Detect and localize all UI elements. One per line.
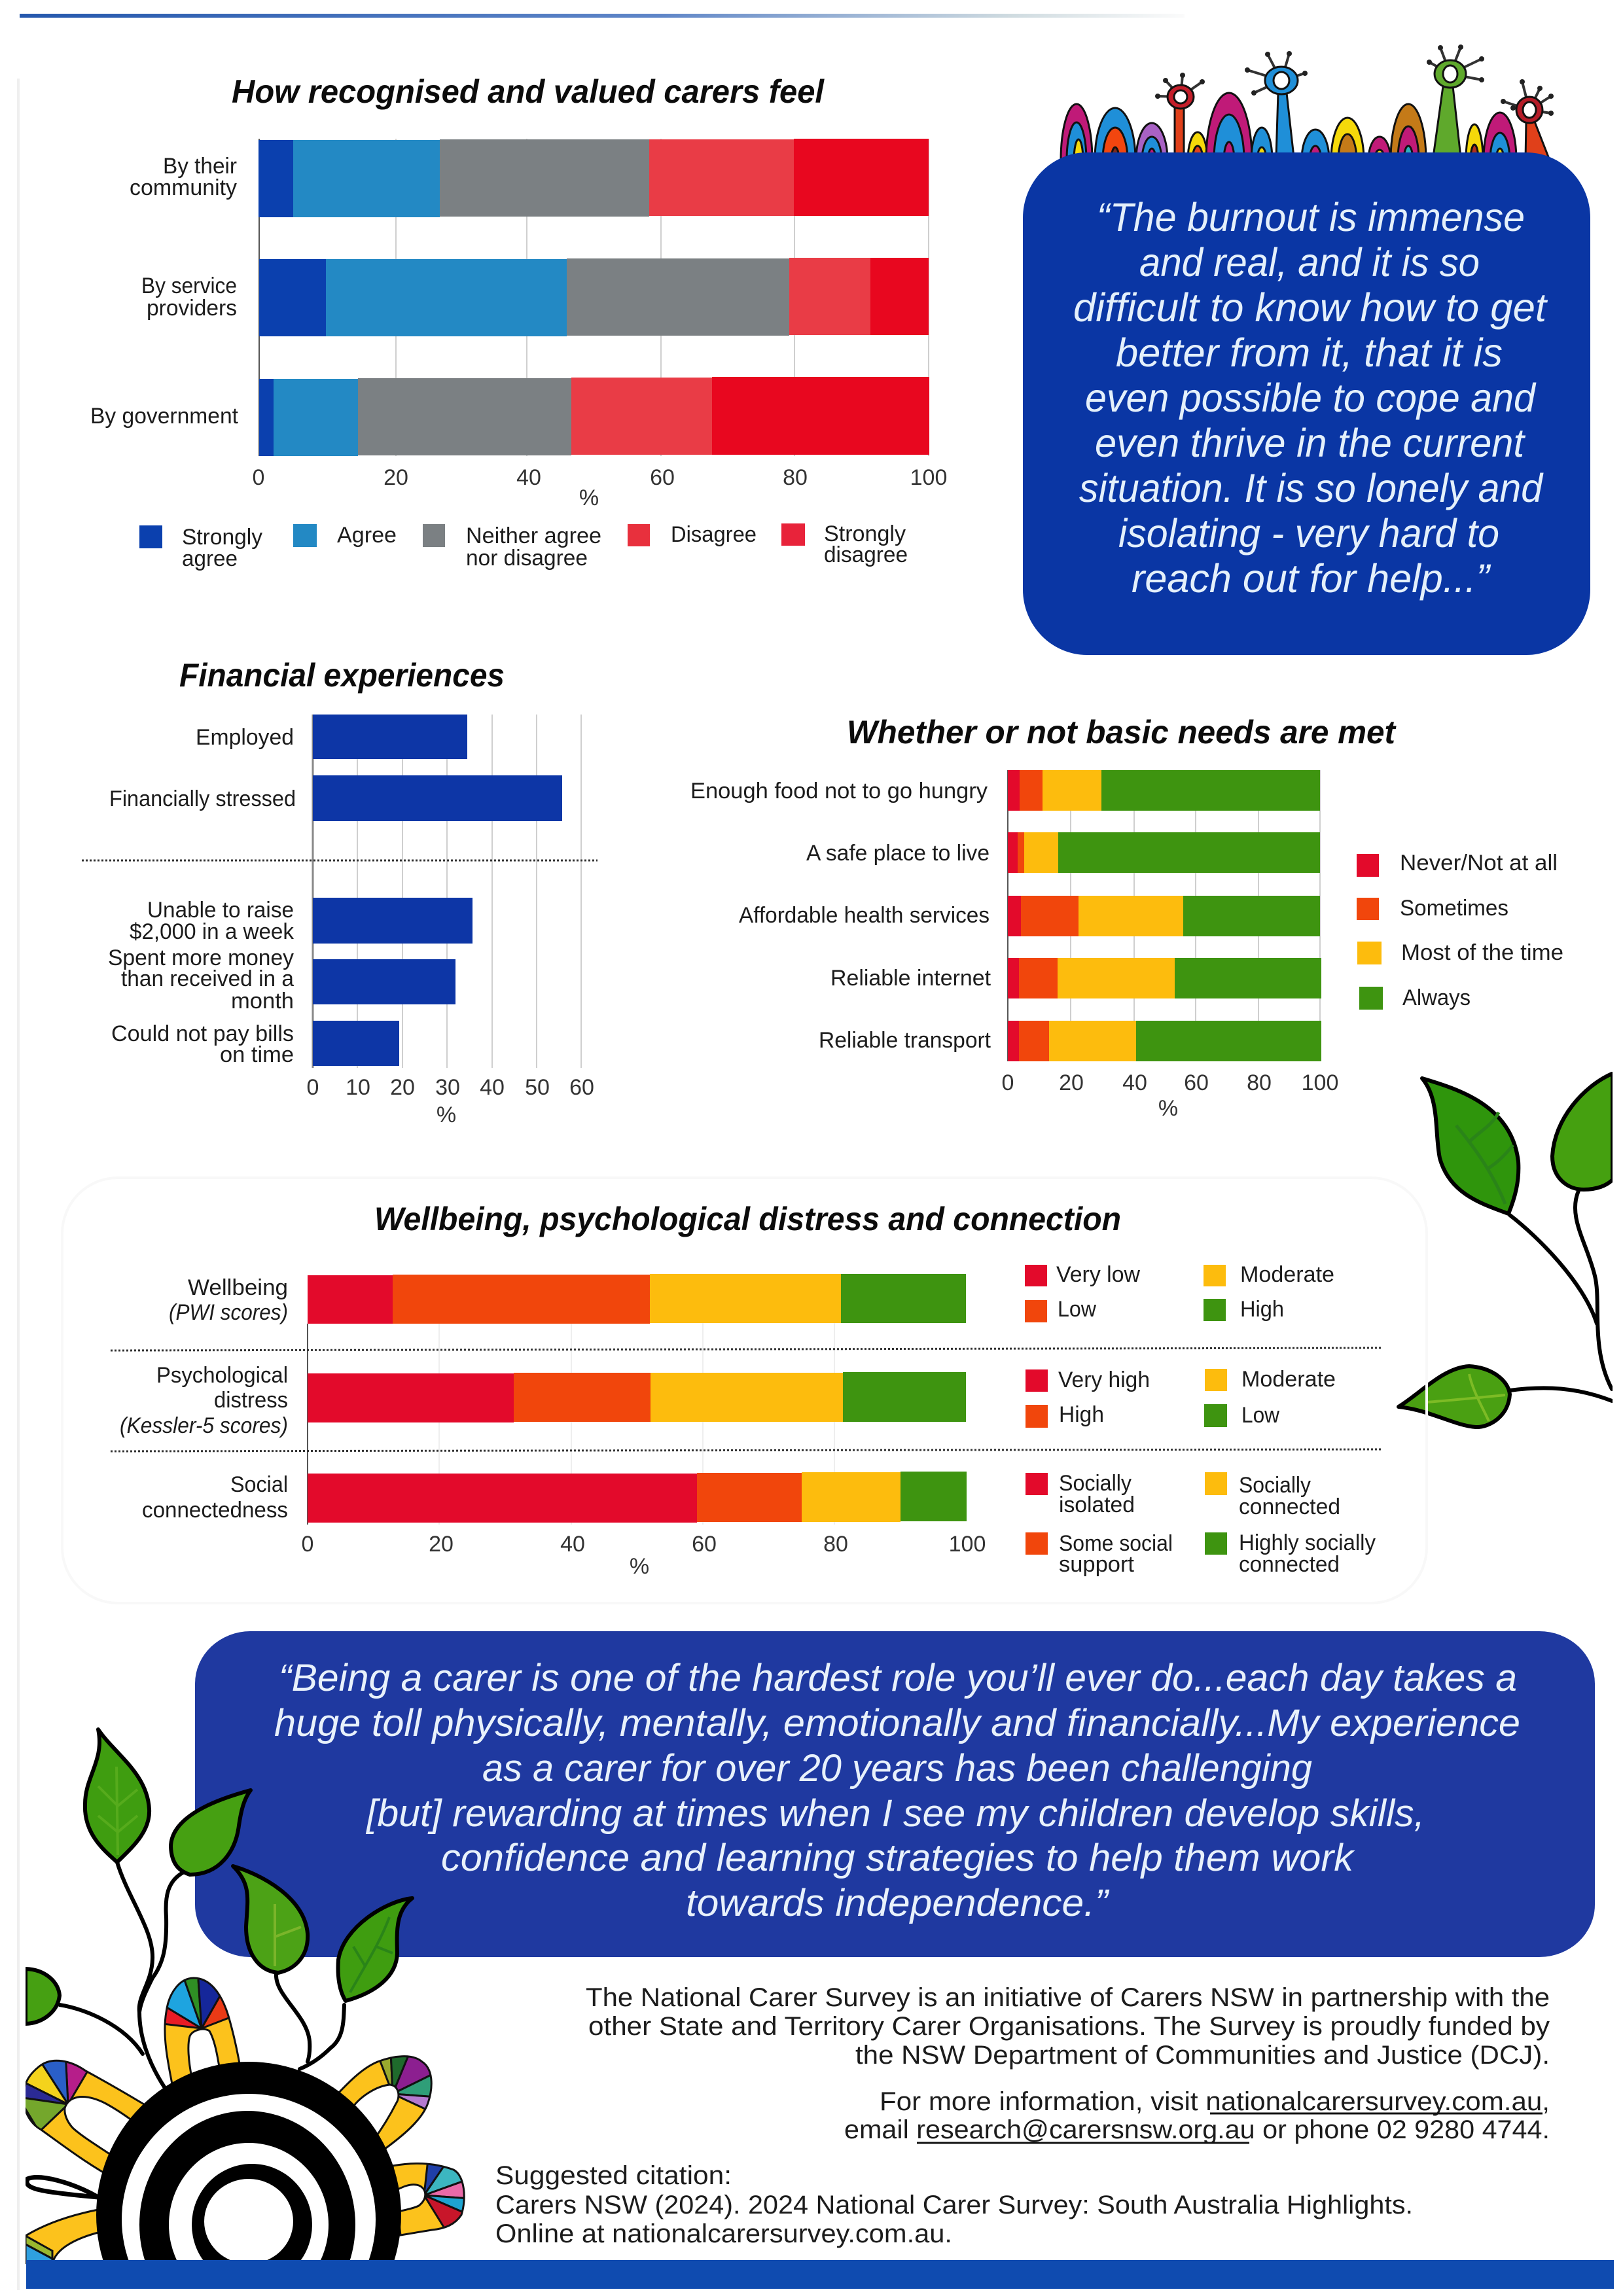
callout: burnout quote <box>1023 152 1590 655</box>
category labels: Enough food not to go hungry <box>690 779 988 804</box>
category labels <box>690 779 991 1053</box>
category labels: $2,000 in a week <box>130 919 294 944</box>
category labels: By their <box>163 154 237 179</box>
axis labels: 40 <box>560 1532 585 1557</box>
axis labels: 60 <box>650 465 675 490</box>
category labels: providers <box>147 296 237 321</box>
category labels: distress <box>214 1388 288 1413</box>
category labels: By service <box>141 274 237 298</box>
axis labels: % <box>1158 1096 1178 1121</box>
callout: being a carer quote: [but] rewarding at times when I see my children develop skills, <box>365 1792 1425 1835</box>
legend: social: isolated <box>1059 1492 1135 1517</box>
axis labels: 20 <box>383 465 408 490</box>
legend: distress: Moderate <box>1241 1367 1336 1392</box>
small outlined loop <box>27 2178 98 2197</box>
stems <box>1510 1191 1612 1401</box>
axis labels: % <box>630 1554 649 1579</box>
legend: agree <box>182 546 238 571</box>
panel: wellbeing, psychological distress and connection <box>62 1178 1427 1603</box>
category labels: Reliable internet <box>830 966 991 991</box>
legend: wellbeing: High <box>1240 1297 1284 1322</box>
panel: whether or not basic needs are met <box>690 714 1563 1121</box>
category labels: Reliable transport <box>819 1028 991 1053</box>
bar: enough food <box>1008 770 1320 811</box>
category labels: Spent more money <box>108 945 294 970</box>
legend: disagree <box>824 542 908 567</box>
axis labels: 40 <box>516 465 541 490</box>
legend: wellbeing: Very low <box>1056 1262 1140 1287</box>
legend: social: Socially <box>1239 1473 1311 1498</box>
text block: survey acknowledgement <box>586 1983 1550 2070</box>
bar: wellbeing <box>308 1274 966 1324</box>
axis labels: 40 <box>480 1075 505 1100</box>
panel: how recognised and valued carers feel <box>90 73 947 571</box>
category labels: (Kessler-5 scores) <box>120 1413 288 1438</box>
category labels: Employed <box>196 725 294 750</box>
petal: upper right <box>339 2055 433 2149</box>
bar: reliable transport <box>1008 1021 1321 1061</box>
callout: being a carer quote: confidence and learning strategies to help them work <box>441 1837 1355 1879</box>
legend: Disagree <box>671 522 757 547</box>
legend: Neither agree <box>466 523 601 548</box>
leaf: upper right <box>1552 1074 1613 1190</box>
axis labels: 60 <box>1184 1070 1209 1095</box>
axis labels: 60 <box>569 1075 594 1100</box>
legend <box>1357 851 1563 1010</box>
leaf: far left <box>26 1969 60 2024</box>
callout: burnout quote: situation. It is so lonely and <box>1079 466 1544 510</box>
illustration: colourful arches and stalks above quote <box>1061 44 1554 228</box>
arches <box>1061 93 1516 228</box>
category labels <box>90 154 239 429</box>
axis labels: 20 <box>1059 1070 1084 1095</box>
category labels: Unable to raise <box>147 898 294 923</box>
axis labels <box>1002 1070 1338 1121</box>
heading: basic needs: Whether or not basic needs are met <box>847 714 1397 751</box>
legend: Always <box>1402 985 1471 1010</box>
axis labels: 100 <box>949 1532 986 1557</box>
axis labels: 20 <box>429 1532 454 1557</box>
callout: burnout quote: difficult to know how to get <box>1073 285 1548 330</box>
antennae <box>1155 44 1554 116</box>
bar: reliable internet <box>1008 958 1321 998</box>
legend: Most of the time <box>1401 940 1563 965</box>
legend: social: connected <box>1239 1552 1340 1577</box>
legend: social: connected <box>1239 1494 1340 1519</box>
text block: contact information: email research@carersnsw.org.au or phone 02 9280 4744. <box>844 2115 1550 2144</box>
axis labels: 80 <box>1247 1070 1272 1095</box>
axis labels <box>253 465 947 510</box>
category labels: By government <box>90 404 239 429</box>
axis labels: 50 <box>525 1075 550 1100</box>
legend: wellbeing: Low <box>1058 1297 1096 1322</box>
footer bar <box>26 2260 1614 2289</box>
illustration: flower with leaves, bottom left <box>18 1729 469 2296</box>
text block: suggested citation: Suggested citation: <box>495 2161 732 2190</box>
text block: suggested citation: Online at nationalcarersurvey.com.au. <box>495 2219 952 2248</box>
petal: top <box>164 1977 241 2083</box>
axis labels: % <box>579 486 599 510</box>
stems <box>60 1862 344 2088</box>
callout: being a carer quote <box>195 1631 1595 1957</box>
axis labels: 0 <box>302 1532 313 1557</box>
leaf: top <box>85 1729 149 1862</box>
legend: Strongly <box>824 521 906 546</box>
bars: financial measures <box>313 715 562 1066</box>
leaf: lower <box>1399 1366 1510 1427</box>
category labels: Psychological <box>156 1363 288 1388</box>
category labels: month <box>231 989 294 1014</box>
callout: burnout quote: “The burnout is immense <box>1097 195 1525 239</box>
category labels: Affordable health services <box>739 903 990 928</box>
text block: contact information <box>844 2087 1550 2144</box>
category labels: (PWI scores) <box>169 1300 288 1325</box>
legend: wellbeing: Moderate <box>1240 1262 1334 1287</box>
legend: social: Socially <box>1059 1471 1132 1496</box>
concentric rings <box>96 2062 401 2260</box>
bar: by service providers <box>259 258 929 336</box>
legend: distress: High <box>1059 1402 1104 1427</box>
legend: Sometimes <box>1400 896 1508 921</box>
axis labels: 80 <box>783 465 808 490</box>
text block: survey acknowledgement: other State and Territory Carer Organisations. The Survey is proudly funded by <box>588 2012 1550 2041</box>
legend: Never/Not at all <box>1400 851 1558 875</box>
petal: upper left <box>26 2060 144 2173</box>
axis labels: 10 <box>346 1075 370 1100</box>
category labels: community <box>130 175 237 200</box>
callout: being a carer quote: huge toll physically, mentally, emotionally and financially...My experience <box>274 1702 1520 1744</box>
text block: survey acknowledgement: The National Carer Survey is an initiative of Carers NSW in partnership with the <box>586 1983 1550 2012</box>
callout: being a carer quote: “Being a carer is one of the hardest role you’ll ever do...each day takes a <box>279 1657 1517 1699</box>
category labels: Financially stressed <box>109 786 296 811</box>
legend: social: Some social <box>1059 1531 1173 1556</box>
legend: distress: Very high <box>1058 1368 1150 1392</box>
bar: psychological distress <box>308 1372 966 1422</box>
petal: lower left <box>26 2210 98 2264</box>
category labels: connectedness <box>142 1498 288 1523</box>
category labels: A safe place to live <box>806 841 990 866</box>
leaf: fourth <box>338 1898 412 2001</box>
legend: wellbeing <box>1025 1262 1334 1322</box>
heading: wellbeing: Wellbeing, psychological distress and connection <box>374 1201 1121 1237</box>
callout: burnout quote: even thrive in the current <box>1095 421 1526 465</box>
leaf: upper left <box>1422 1078 1518 1214</box>
legend: distress: Low <box>1241 1403 1279 1428</box>
legend <box>139 521 908 571</box>
callout: being a carer quote: as a carer for over 20 years has been challenging <box>482 1747 1312 1790</box>
heading: financial experiences: Financial experiences <box>179 657 505 694</box>
axis labels: % <box>437 1103 456 1127</box>
category labels: Social <box>230 1472 288 1497</box>
axis labels: 80 <box>823 1532 848 1557</box>
callout: burnout quote: and real, and it is so <box>1139 240 1480 285</box>
text block: contact information: For more information, visit nationalcarersurvey.com.au, <box>880 2087 1550 2116</box>
axis labels: 60 <box>692 1532 717 1557</box>
legend: Agree <box>337 523 397 548</box>
illustration: leaves on right edge <box>1399 1074 1613 1427</box>
axis labels: 30 <box>435 1075 460 1100</box>
text block: suggested citation <box>495 2161 1413 2248</box>
category labels: Wellbeing <box>188 1275 288 1300</box>
category labels: on time <box>220 1042 294 1067</box>
axis labels: 0 <box>307 1075 319 1100</box>
bar: safe place <box>1008 832 1320 873</box>
callout: being a carer quote: towards independence.” <box>686 1882 1110 1924</box>
category labels: Could not pay bills <box>111 1021 294 1046</box>
axis labels: 0 <box>253 465 264 490</box>
category labels <box>120 1275 288 1523</box>
callout: burnout quote: better from it, that it is <box>1116 330 1503 375</box>
panel: financial experiences <box>82 657 597 1127</box>
legend: Strongly <box>182 525 262 550</box>
axis labels: 100 <box>1302 1070 1338 1095</box>
legend: nor disagree <box>466 546 588 571</box>
leaf: second <box>171 1790 251 1875</box>
axis labels: 100 <box>910 465 947 490</box>
leaf: third <box>233 1866 308 1973</box>
axis labels: 0 <box>1002 1070 1014 1095</box>
axis labels <box>307 1075 594 1127</box>
axis labels <box>302 1532 986 1579</box>
petal: right <box>393 2159 469 2235</box>
text block: survey acknowledgement: the NSW Department of Communities and Justice (DCJ). <box>855 2041 1550 2070</box>
callout: burnout quote: reach out for help...” <box>1132 556 1491 601</box>
callout: burnout quote: even possible to cope and <box>1085 376 1537 420</box>
bar: affordable health <box>1008 896 1320 936</box>
legend: social: support <box>1059 1552 1135 1577</box>
bar: by their community <box>259 139 929 217</box>
category labels: than received in a <box>121 966 294 991</box>
category labels <box>108 725 296 1067</box>
legend: distress <box>1026 1367 1336 1428</box>
bar: social connectedness <box>308 1472 967 1523</box>
text block: suggested citation: Carers NSW (2024). 2024 National Carer Survey: South Australia Highlights. <box>495 2191 1413 2219</box>
legend: social <box>1026 1471 1376 1577</box>
legend: social: Highly socially <box>1239 1530 1376 1555</box>
bar: by government <box>259 377 929 456</box>
axis labels: 20 <box>390 1075 415 1100</box>
heading: recognised and valued: How recognised and valued carers feel <box>232 73 825 110</box>
callout: burnout quote: isolating - very hard to <box>1118 511 1499 556</box>
stalks and rings <box>1168 60 1550 160</box>
axis labels: 40 <box>1122 1070 1147 1095</box>
